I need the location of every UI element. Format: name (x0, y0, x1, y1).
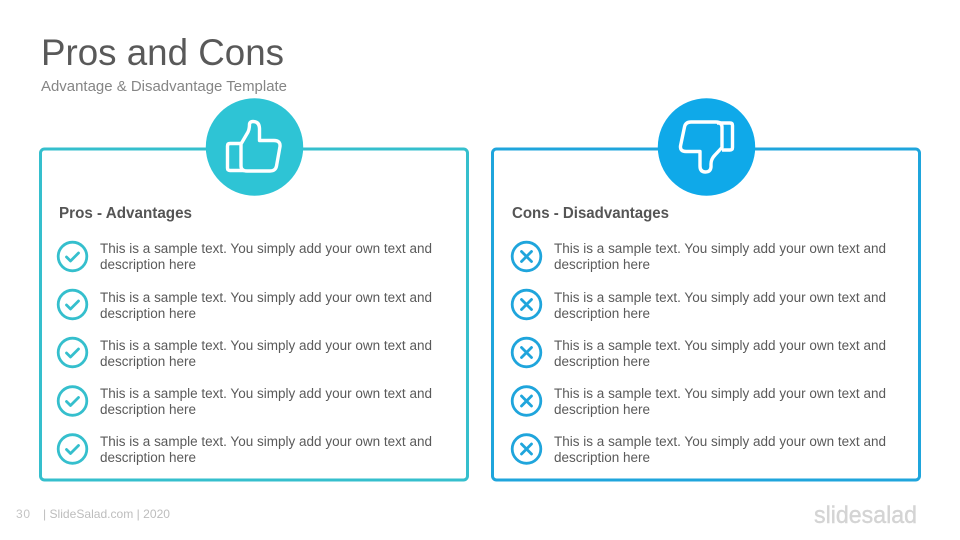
panel: pros (40, 98, 468, 480)
panel: cons (492, 98, 920, 480)
pros item 5: description here (100, 450, 196, 465)
pros item 1: description here (100, 257, 196, 272)
cons item 5: description here (554, 450, 650, 465)
cons item 3 (512, 338, 886, 369)
pros item 4: description here (100, 402, 196, 417)
cons item 1: description here (554, 257, 650, 272)
pros item 1 (58, 241, 432, 272)
pros item 5 (58, 434, 432, 465)
icon: thumbs up (206, 98, 303, 196)
pros item 2 (58, 290, 432, 321)
cons item 2: description here (554, 306, 650, 321)
cons item 2 (512, 290, 886, 321)
pros item 2: This is a sample text. You simply add your own text and (100, 290, 432, 305)
pros item 4: This is a sample text. You simply add your own text and (100, 386, 432, 401)
cons item 3: description here (554, 354, 650, 369)
icon: thumbs down (658, 98, 755, 196)
cons item 5: This is a sample text. You simply add your own text and (554, 434, 886, 449)
title: Pros and Cons (41, 32, 284, 73)
pros item 5: This is a sample text. You simply add your own text and (100, 434, 432, 449)
cons item 3: This is a sample text. You simply add your own text and (554, 338, 886, 353)
pros item 1: This is a sample text. You simply add your own text and (100, 241, 432, 256)
cons item 5 (512, 434, 886, 465)
cons item 1 (512, 241, 886, 272)
pros item 3 (58, 338, 432, 369)
heading: pros: Pros - Advantages (59, 205, 192, 222)
pros item 2: description here (100, 306, 196, 321)
cons item 4 (512, 386, 886, 417)
pros item 3: description here (100, 354, 196, 369)
heading: cons: Cons - Disadvantages (512, 205, 669, 222)
footer text: | SlideSalad.com | 2020 (43, 507, 170, 521)
cons item 4: description here (554, 402, 650, 417)
pros item 4 (58, 386, 432, 417)
subtitle: Advantage & Disadvantage Template (41, 78, 287, 95)
pros item 3: This is a sample text. You simply add your own text and (100, 338, 432, 353)
page number: 30 (16, 507, 30, 521)
cons item 4: This is a sample text. You simply add your own text and (554, 386, 886, 401)
cons item 2: This is a sample text. You simply add your own text and (554, 290, 886, 305)
logo: slidesalad (814, 502, 917, 529)
cons item 1: This is a sample text. You simply add your own text and (554, 241, 886, 256)
